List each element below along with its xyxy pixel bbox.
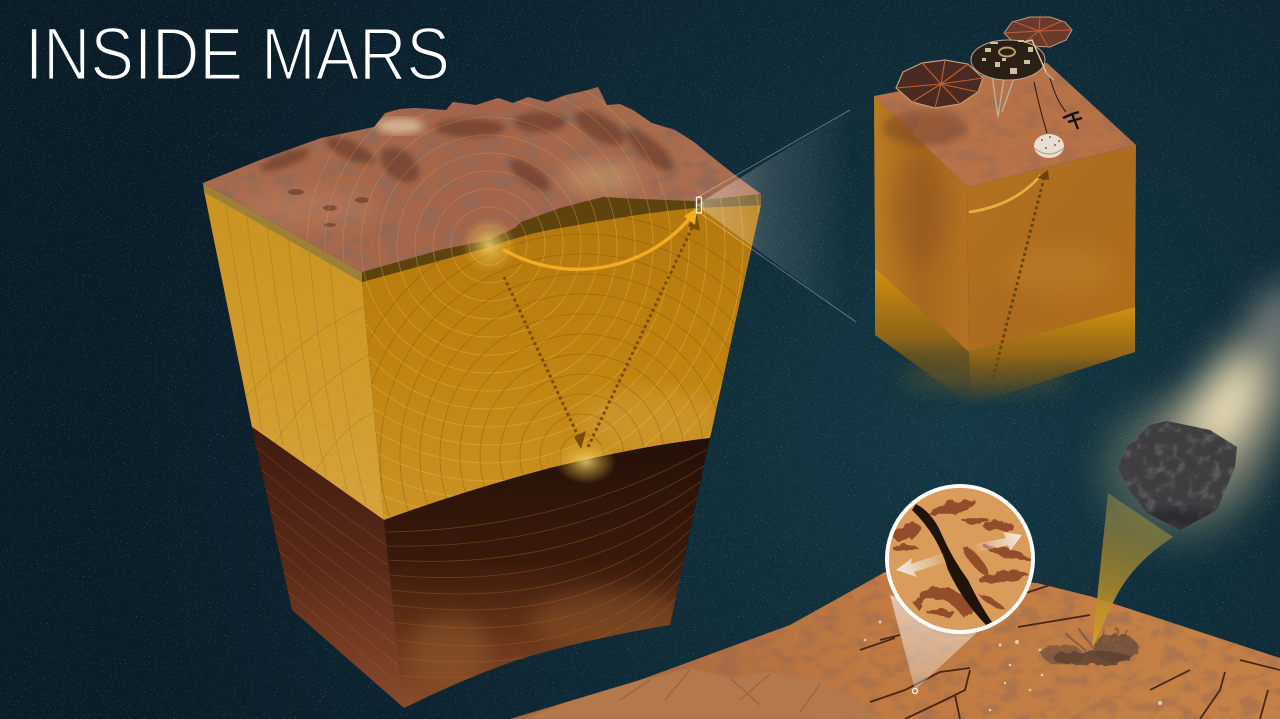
- zoom cone from fault to lens: [890, 595, 985, 690]
- panel shadow: [883, 110, 967, 146]
- tether cables: [1034, 78, 1066, 133]
- impact debris plume: [1042, 628, 1138, 665]
- lander body deck: [971, 40, 1045, 80]
- inset mantle colour patches: [892, 155, 1115, 296]
- glow: core reflection point: [556, 440, 616, 484]
- mantle: front face: [360, 195, 765, 525]
- inset block with lander: [870, 17, 1140, 405]
- robotic arm: [1024, 40, 1046, 72]
- lander legs: [992, 72, 1054, 117]
- rock bands: [891, 496, 1031, 616]
- rocky planet surface: [200, 85, 765, 275]
- inset curved wave arrow: [970, 176, 1040, 212]
- seismic wave rings on the surface: [306, 90, 666, 272]
- title: INSIDE MARS: [25, 12, 450, 96]
- core: left face: [252, 427, 404, 708]
- crust: left edge band: [203, 183, 362, 282]
- surface with faults and impact site: [505, 570, 1280, 719]
- inset arrow head: [1037, 170, 1049, 180]
- inset lower layer: front: [969, 307, 1135, 405]
- fault location marker: [912, 688, 918, 694]
- inset lower layer: left: [875, 268, 971, 405]
- solar panel right: [1004, 17, 1072, 47]
- inset glow beneath block: [900, 362, 1070, 394]
- inset surface: [870, 60, 1140, 190]
- dotted arrow: reflected wave up to lander: [588, 214, 700, 447]
- solar panel left: [896, 60, 983, 108]
- marker: lander location on block: [696, 197, 702, 213]
- meteor rock: [1115, 418, 1240, 533]
- dotted arrow: wave down to core: [504, 277, 586, 449]
- inset dotted wave arrow: [993, 178, 1044, 378]
- gold beam from meteor to impact: [1092, 493, 1173, 648]
- glow: quake source: [461, 217, 517, 273]
- zoom projection beam to inset block: [696, 110, 856, 322]
- foreground hills: [525, 668, 880, 719]
- seismometer dome: [1034, 134, 1064, 158]
- magnifier lens: fault close-up: [885, 485, 1035, 635]
- heat probe instrument: [1063, 112, 1082, 129]
- crack: [912, 504, 992, 625]
- small craters: [864, 620, 1162, 711]
- crust: right end band: [694, 194, 761, 208]
- lander: [896, 17, 1082, 158]
- seismic wave rings through the mantle: [363, 194, 760, 518]
- main cutaway block of Mars: [199, 0, 824, 708]
- arrow: moving left: [896, 553, 946, 577]
- inset front face: [967, 145, 1136, 352]
- core: front face: [384, 438, 710, 708]
- curved surface wave arrow: [504, 208, 697, 269]
- reflected wave rings around the core boundary point: [368, 217, 745, 518]
- dark mountain ridges: [260, 108, 676, 192]
- mantle: left face: [200, 185, 390, 525]
- inset left face: [874, 96, 969, 352]
- crust: front cut band: [362, 197, 694, 282]
- meteor tail glow: [1104, 275, 1280, 538]
- arrow: moving right: [975, 532, 1022, 552]
- fault cracks: [860, 585, 1280, 719]
